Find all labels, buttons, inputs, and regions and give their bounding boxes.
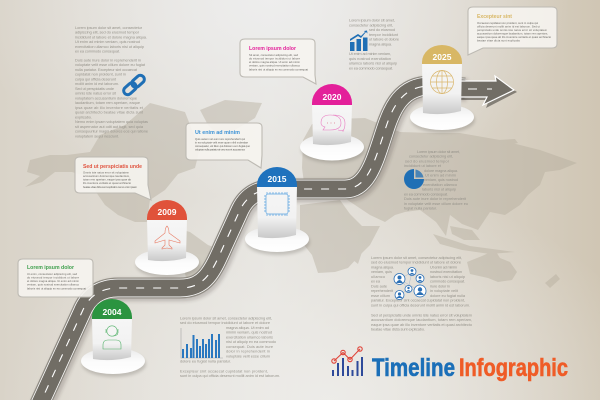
callout: 2004: do eiusmod tempor incididunt ut labore	[27, 276, 80, 280]
title: Timeline	[372, 354, 455, 382]
callout: 2025: beatae vitae dicta sunt explicabo	[477, 38, 520, 42]
text block: bar chart: magna aliqua. Ut enim ad	[226, 325, 269, 330]
text block: upper left: adipiscing elit, sed do eiusmod tempor	[75, 30, 140, 35]
text block: pie: Lorem ipsum dolor sit amet,	[417, 149, 460, 154]
text block: upper right: ullamco laboris nisi ut aliquip	[349, 60, 397, 66]
icon: title chart	[332, 347, 363, 376]
pin: 2009	[135, 200, 200, 278]
callout: 2009: totam rem aperiam, eaque ipsa quae ab	[83, 178, 132, 182]
pin: 2004	[81, 299, 146, 377]
text block: upper right: Ut enim ad minim veniam,	[349, 51, 391, 56]
text block: network: esse cillum	[371, 293, 390, 298]
text block: upper left: voluptatem sequi nesciunt.	[75, 134, 119, 138]
callout: 2004: veniam, quis nostrud exercitation ullamco	[27, 282, 80, 286]
text block: network: in voluptate velit	[430, 288, 459, 293]
callout: 2009: accusantium doloremque laudantium,	[83, 174, 130, 178]
text block: upper left: Sed ut perspiciatis unde	[75, 86, 114, 91]
pin: 2004: 2004	[103, 307, 122, 317]
callout: 2004: laboris nisi ut aliquip ex ea commodo consequat	[27, 286, 86, 290]
text block: upper left: Ut enim ad minim veniam, quis nostrud	[75, 39, 140, 44]
text block: bar chart: Lorem ipsum dolor sit amet, consectetur adipiscing elit,	[180, 316, 272, 320]
text block: network: dolore eu fugiat nulla	[430, 293, 466, 298]
text block: pie: sed do eiusmod tempor	[405, 158, 450, 163]
text block: network: commodo consequat.	[430, 279, 465, 284]
icon: chain link	[122, 74, 146, 96]
text block: upper left: Duis aute irure dolor in reprehenderit in	[75, 58, 141, 62]
callout: 2025	[468, 7, 557, 55]
pin: 2025	[410, 45, 475, 133]
text block: upper left: cupidatat non proident, sunt in	[75, 72, 126, 77]
callout: 2015: in ea voluptate velit esse quam nihil molestiae	[195, 140, 248, 144]
text block: upper right: quis nostrud exercitation	[349, 56, 391, 61]
callout: 2020: Lorem ipsum dolor	[249, 46, 296, 52]
icon: people network	[394, 268, 426, 300]
text block: upper left: ex ea commodo consequat.	[75, 49, 120, 54]
callout: 2009: Sed ut perspiciatis unde	[83, 164, 142, 170]
icon: airplane	[155, 226, 180, 249]
icon: speech bubbles	[321, 115, 345, 131]
text block: network: laboris nisi ut aliquip	[430, 274, 465, 279]
text block: upper right: tempor incididunt	[369, 32, 399, 37]
callout: 2009: illo inventore veritatis et quasi architecto	[83, 181, 132, 185]
text block: pie: Duis aute irure dolor in reprehenderit	[404, 196, 467, 201]
callout: 2025: accusantium doloremque laudantium, totam rem aperiam,	[477, 32, 548, 36]
text block: network: veniam, quis	[371, 269, 392, 274]
text block: upper right: sed do eiusmod	[369, 27, 395, 32]
text block: upper left: ipsa quae ab illo inventore veritatis et	[75, 105, 144, 110]
callout: 2004: Lorem ipsum dolor	[27, 265, 74, 271]
text block: upper right: consectetur adipiscing elit,	[349, 22, 393, 27]
text block: bar chart: sed do eiusmod tempor incididunt ut labore et dolore	[180, 320, 270, 325]
callout: 2020: veniam, quis nostrud exercitation ullamco	[249, 64, 300, 68]
bar chart	[181, 328, 223, 358]
text block: upper right	[349, 18, 399, 70]
text block: pie: dolore magna aliqua.	[424, 168, 458, 173]
pin: 2009: 2009	[158, 207, 177, 217]
text block: upper left	[75, 25, 148, 138]
text block: network: Sed ut perspiciatis unde omnis iste natus error sit voluptatem	[371, 312, 472, 318]
text block: bar chart: nisi ut aliquip ex ea commodo	[226, 339, 276, 344]
callout: 2015: Quis autem vel eum iure reprehenderit qui	[195, 137, 245, 141]
text block: pie: incididunt ut labore et	[404, 163, 442, 168]
text block: upper left: sit aspernatur aut odit aut fugit, sed quia	[75, 124, 144, 129]
text block: pie: ex ea commodo consequat.	[404, 191, 448, 196]
pin: 2020	[300, 84, 365, 163]
text block: pie: fugiat nulla pariatur.	[404, 206, 437, 211]
text block: network: magna aliqua.	[371, 264, 394, 270]
callout: 2015	[186, 123, 262, 168]
icon: support agent	[103, 326, 121, 349]
callout: 2025: officia deserunt mollit anim id est laborum. Sed ut	[477, 24, 540, 28]
callout: 2015: voluptas nulla pariatur at vero eos et accusamus	[195, 148, 246, 152]
text block: pie: exercitation ullamco	[423, 182, 457, 187]
text block: upper right: ex ea commodo consequat.	[349, 65, 393, 70]
icon: globe	[430, 70, 454, 94]
callout: 2015: consequatur, vel illum qui dolorem eum fugiat quo	[195, 144, 250, 148]
text block: upper right: Lorem ipsum dolor sit amet,	[349, 18, 395, 22]
callout: 2020	[240, 39, 316, 84]
text block: network: sunt in culpa qui officia deserunt mollit anim id est laborum.	[371, 302, 470, 308]
text block: network: Lorem ipsum dolor sit amet, consectetur adipiscing elit,	[371, 255, 462, 260]
text block: network: pariatur. Excepteur sint occaecat cupidatat non proident,	[371, 298, 465, 303]
callout: 2009	[75, 157, 151, 200]
callout: 2025: eaque ipsa quae ab illo inventore veritatis et quasi architecto	[477, 35, 552, 39]
text block: pie: in voluptate velit esse cillum dolore eu	[404, 201, 468, 206]
pin: 2015	[245, 167, 310, 255]
text block: network: Duis aute	[371, 284, 387, 288]
text block: upper right: magna aliqua.	[369, 41, 392, 46]
text block: pie: consectetur adipiscing elit,	[409, 154, 453, 159]
text block: bar chart: minim veniam, quis nostrud	[226, 330, 272, 335]
title: Infographic	[459, 354, 568, 382]
callout: 2004	[18, 259, 93, 297]
text block: pie: Ut enim ad minim	[425, 172, 456, 178]
text block: network: nostrud exercitation	[430, 269, 462, 274]
text block: upper left: culpa qui officia deserunt	[75, 76, 117, 82]
icon: microchip	[264, 192, 290, 216]
text block: upper left: consequuntur magni dolores eos qui ratione	[75, 129, 148, 134]
text block: upper left: incididunt ut labore et dolore magna aliqua.	[75, 34, 147, 40]
text block: upper left: Lorem ipsum dolor sit amet, consectetur	[75, 25, 143, 30]
text block: network: accusantium doloremque laudantium, totam rem aperiam,	[371, 317, 472, 322]
text block: upper left: Nemo enim ipsam voluptatem quia voluptas	[75, 119, 148, 124]
text block: pie: veniam, quis nostrud	[424, 177, 458, 182]
text block: bar chart: exercitation ullamco laboris	[226, 334, 273, 340]
text block: upper right: ut labore et dolore	[369, 36, 399, 42]
title	[372, 354, 568, 382]
text block: bar chart: consequat. Duis aute irure	[226, 344, 273, 349]
callout: 2009: Omnis iste natus error sit voluptatem	[83, 170, 130, 174]
text block: upper left: voluptate velit esse cillum dolore eu fugiat	[75, 62, 146, 67]
text block: upper left: omnis iste natus error sit	[75, 91, 117, 96]
callout: 2004: Ut enim, consectetur adipiscing elit, sed	[27, 272, 78, 276]
arrow head	[455, 76, 517, 108]
text block: upper left: mollit anim id est laborum.	[75, 81, 119, 86]
callout: 2020: do eiusmod tempor incididunt ut labore	[249, 56, 300, 60]
text block: bar chart: voluptate velit esse cillum	[226, 354, 270, 358]
callout: 2009: beatae vitae dicta sunt explicabo nemo enim ipsam	[83, 185, 138, 189]
text block: upper left: explicabo.	[75, 114, 92, 120]
icon: pie chart	[404, 169, 424, 189]
text block: network: ex ea	[371, 279, 381, 284]
road with arrow	[38, 76, 517, 400]
text block: pie	[404, 149, 468, 211]
text block: bar chart: Excepteur sint occaecat cupidatat non proident,	[180, 368, 268, 374]
callout: 2025: perspiciatis unde omnis iste natus error sit voluptatem	[477, 28, 548, 32]
text block: network: Ut enim ad minim	[430, 264, 457, 270]
callout: 2025: Excepteur sint	[477, 14, 512, 20]
text block: upper left: laudantium, totam rem aperiam, eaque	[75, 100, 140, 105]
callout: 2025: Occaecat cupidatat non proident, sunt in culpa qui	[477, 21, 538, 25]
text block: network: reprehenderit	[371, 288, 394, 293]
text block: network: beatae vitae dicta sunt explicabo.	[371, 327, 425, 332]
text block: upper left: nulla pariatur. Excepteur sint occaecat	[75, 67, 138, 72]
text block: network: eaque ipsa quae ab illo inventore veritatis et quasi architecto	[371, 322, 472, 327]
callout: 2015: Ut enim ad minim	[195, 130, 240, 136]
text block: bar chart: dolore eu fugiat nulla pariatur.	[180, 358, 231, 364]
callout: 2020: laboris nisi ut aliquip ex ea commodo consequat	[249, 68, 308, 72]
pin: 2020: 2020	[323, 92, 342, 102]
world map	[25, 100, 577, 290]
text block: network: sed do eiusmod tempor incididunt ut labore et dolore	[371, 260, 461, 265]
text block: upper left: exercitation ullamco laboris nisi ut aliquip	[75, 44, 144, 49]
text block: network: ullamco	[371, 274, 385, 279]
icon: growth chart	[350, 30, 368, 51]
callout: 2020: et dolore magna aliqua. Ut enim ad minim	[249, 60, 301, 64]
text block: bar chart	[180, 316, 280, 378]
callout: 2020: Sit amet, consectetur adipiscing elit, sed	[249, 53, 298, 57]
text block: pie: laboris nisi ut aliquip	[422, 187, 456, 192]
text block: upper left: quasi architecto beatae vitae dicta sunt	[75, 110, 144, 115]
text block: bar chart: sunt in culpa qui officia deserunt mollit anim id est laborum.	[180, 373, 280, 378]
text block: network: irure dolor in	[430, 284, 450, 288]
text block: upper left: voluptatem accusantium doloremque	[75, 96, 137, 100]
text block: bar chart: dolor in reprehenderit in	[226, 349, 270, 354]
pin: 2015: 2015	[268, 174, 287, 184]
text block: network	[371, 255, 472, 332]
pin: 2025: 2025	[433, 52, 452, 62]
callout: 2004: et dolore magna aliqua. Ut enim ad minim	[27, 279, 80, 283]
